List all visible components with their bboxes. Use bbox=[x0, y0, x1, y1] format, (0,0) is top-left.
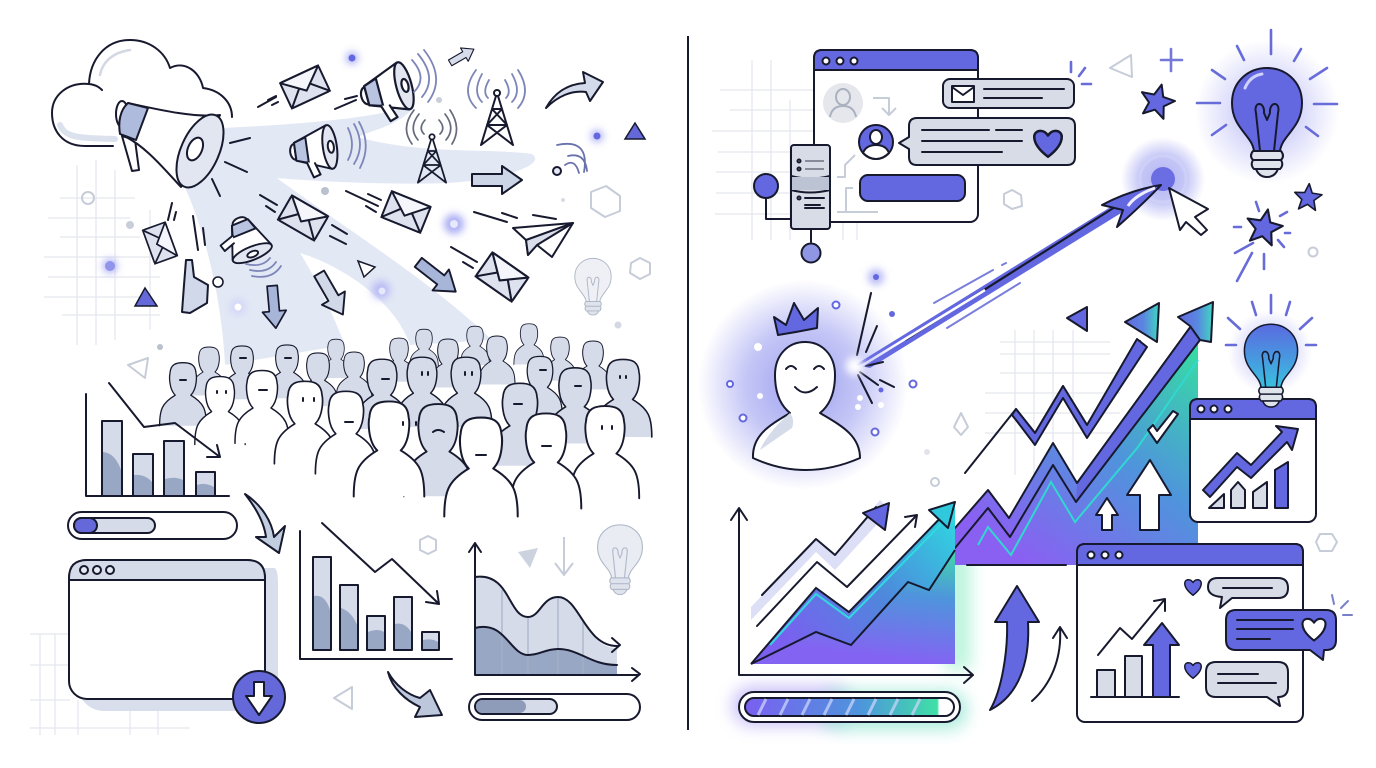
icon: pale bulb lower bbox=[598, 525, 642, 595]
arrow: curved down bbox=[245, 494, 285, 553]
decor: glowing dots bbox=[103, 52, 603, 315]
arrow: block arrows bbox=[260, 166, 522, 329]
button bbox=[860, 175, 965, 201]
decor: upper right markers bbox=[1004, 49, 1318, 256]
decor: ticks and hexagon right edge bbox=[1316, 534, 1352, 615]
arrow: curved lower right bbox=[388, 672, 442, 717]
icon: stars bbox=[1137, 80, 1323, 247]
person glow bbox=[698, 280, 908, 490]
crowd of passive people bbox=[160, 324, 652, 516]
bubble: mail notification bbox=[943, 79, 1074, 108]
icon: sound waves bbox=[246, 50, 436, 277]
arrow: big curved up bbox=[990, 586, 1039, 710]
icon: tower waves left bbox=[406, 110, 457, 144]
panel: broadcast (left side) bbox=[30, 40, 652, 735]
icon: radio tower right bbox=[481, 90, 513, 145]
icon: cursor bbox=[1169, 188, 1208, 235]
icon: click target glow bbox=[1121, 137, 1205, 221]
icon: wifi dot and waves bbox=[553, 144, 587, 175]
arrow: small white up bbox=[1096, 498, 1118, 530]
area chart: big rising chart bbox=[955, 302, 1213, 565]
background grid: top bbox=[712, 60, 857, 240]
icon: server with nodes bbox=[754, 145, 830, 262]
icon: envelopes bbox=[143, 65, 528, 302]
icon: small glowing bulb bbox=[1226, 295, 1316, 407]
arrow: thin curved up bbox=[1032, 627, 1067, 701]
decor: pale markers around lower charts bbox=[128, 358, 573, 709]
arrow: small up-right bbox=[446, 42, 478, 70]
window: empty with shadow bbox=[69, 560, 278, 711]
crowd faces bbox=[180, 358, 626, 455]
icon: cloud bbox=[52, 40, 232, 180]
progress bar: glowing full bbox=[732, 686, 968, 730]
bubble: indigo with white heart bbox=[1226, 610, 1336, 660]
progress bar: faded bbox=[469, 694, 640, 720]
line chart: rising chart with axes bbox=[731, 500, 973, 683]
bar chart: falling large bbox=[300, 523, 452, 659]
window: dashboard with rising bars bbox=[1190, 399, 1316, 522]
icon: smiling person with crown bbox=[753, 303, 860, 470]
arrow: small grey bend bbox=[873, 98, 896, 115]
divider between the two panels bbox=[687, 36, 689, 730]
icon: check mark bbox=[1148, 411, 1178, 443]
arrow: curved up-right bbox=[546, 72, 603, 108]
bubble: bottom light bbox=[1206, 662, 1288, 706]
arrow: large white up bbox=[1127, 460, 1171, 530]
bubble: top light bbox=[1208, 578, 1288, 608]
icon: ghost avatar bbox=[823, 83, 863, 123]
background grid: middle bbox=[985, 330, 1120, 475]
background grid: upper left bbox=[44, 160, 160, 345]
bar chart: growth bbox=[1091, 599, 1179, 697]
progress bar: low bbox=[68, 512, 237, 539]
icon: download circle bbox=[233, 671, 285, 723]
icon: pale bulb upper bbox=[575, 258, 611, 315]
icon: heart top bbox=[1185, 580, 1201, 595]
icon: hand shape with dot bbox=[182, 260, 223, 313]
background grid: lower left bbox=[30, 634, 190, 735]
icon: active avatar bbox=[859, 125, 893, 159]
area chart: declining bbox=[469, 543, 640, 681]
arrow: beam from person to target bbox=[855, 185, 1161, 368]
signal beam spreading from the megaphone bbox=[183, 105, 535, 365]
panel: targeted engagement (right side) bbox=[698, 30, 1352, 730]
icon: small megaphones bbox=[213, 60, 419, 269]
bubble: heart message bbox=[899, 118, 1075, 165]
icon: radio tower waves bbox=[468, 70, 525, 108]
icon: heart bottom bbox=[1185, 663, 1201, 678]
lines: megaphone sound rays bbox=[168, 96, 556, 268]
star sparks bbox=[1234, 202, 1290, 281]
decor: triangles and hexagons bbox=[82, 97, 650, 350]
window: profile and messages bbox=[814, 50, 978, 222]
window: engagement dashboard bbox=[1077, 544, 1303, 722]
icon: big glowing bulb bbox=[1195, 30, 1339, 184]
bar chart: falling small bbox=[86, 383, 229, 496]
icon: paper plane bbox=[513, 223, 573, 257]
green glow behind charts bbox=[945, 540, 971, 670]
connector lines bbox=[837, 155, 878, 212]
arrow: thin rising band arrow bbox=[965, 303, 1159, 473]
icon: large megaphone bbox=[116, 101, 233, 194]
decor: sparkles near person bbox=[727, 269, 1087, 486]
icon: radio tower left bbox=[418, 134, 446, 183]
